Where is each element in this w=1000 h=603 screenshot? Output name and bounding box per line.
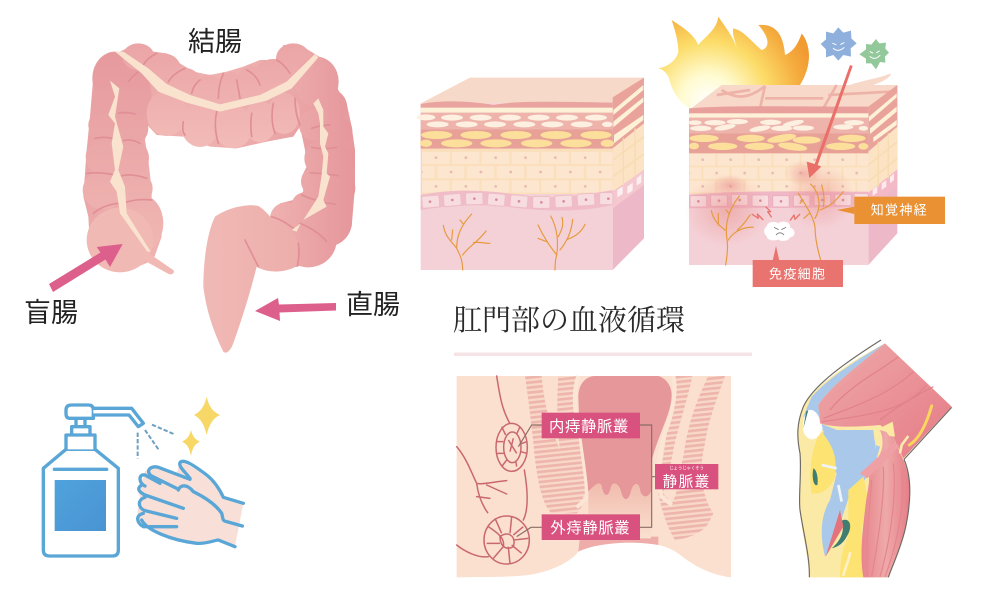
label: venous plexus: 静脈叢 xyxy=(663,473,711,490)
leader lines xyxy=(517,425,656,537)
colon: ascending segment xyxy=(83,52,163,252)
label: colon: 結腸 xyxy=(188,27,242,57)
label: external plexus xyxy=(542,514,640,540)
illustration: hand sanitizer xyxy=(43,397,243,556)
arrow: pathogen into skin xyxy=(807,65,853,178)
yellow flat cells xyxy=(420,131,614,147)
hands xyxy=(137,461,243,547)
sensory nerve label xyxy=(837,197,945,224)
label: venous plexus xyxy=(655,464,718,490)
dark accents xyxy=(803,410,850,548)
basal cells xyxy=(422,192,613,208)
skin top face xyxy=(421,78,644,103)
internal hemorrhoidal plexus xyxy=(496,423,527,471)
label: rectum: 直腸 xyxy=(346,290,400,320)
spray xyxy=(138,425,175,458)
label: internal plexus: 内痔静脈叢 xyxy=(549,418,629,435)
illustration: healthy skin block xyxy=(417,78,644,270)
sparkle large xyxy=(194,397,220,435)
skin side face xyxy=(613,78,644,270)
blue connective tissue xyxy=(803,343,885,557)
immune cell label: 免疫細胞 xyxy=(769,266,826,281)
flame xyxy=(658,17,809,108)
illustration: knee anatomy xyxy=(798,340,952,577)
label: cecum: 盲腸 xyxy=(24,298,78,328)
blood vessels xyxy=(457,376,527,557)
colon: silhouette xyxy=(83,43,355,272)
hatched muscle bands xyxy=(525,376,725,540)
colon: cecum xyxy=(87,208,174,274)
skin layers xyxy=(421,101,613,270)
immune cell label xyxy=(753,260,843,287)
colon: creases xyxy=(87,53,338,267)
label: internal plexus xyxy=(542,413,640,438)
skin side face xyxy=(868,85,897,265)
virus blue xyxy=(821,27,857,61)
rectum xyxy=(203,205,299,353)
keratinocyte cells xyxy=(417,114,613,127)
sensory nerve label: 知覚神経 xyxy=(871,203,928,218)
skin outline xyxy=(798,340,952,577)
calf muscle xyxy=(860,430,910,577)
inflammation glows xyxy=(685,160,855,247)
heading: anal circulation: 肛門部の血液循環 xyxy=(453,304,685,337)
virus green xyxy=(859,39,889,69)
basal cells xyxy=(690,193,868,207)
anal canal xyxy=(578,376,672,499)
leg silhouette xyxy=(798,343,952,577)
tissue background xyxy=(457,376,731,577)
pale strip outlines xyxy=(575,376,675,507)
bottle label xyxy=(55,480,106,531)
patella highlight xyxy=(803,410,823,439)
spark marks xyxy=(752,207,800,221)
thigh muscle xyxy=(818,343,952,458)
arrow: to cecum xyxy=(49,244,123,292)
lower mucosa xyxy=(578,537,658,552)
disordered yellow cells xyxy=(689,132,868,152)
colon: descending segment xyxy=(292,57,355,247)
external hemorrhoidal plexus xyxy=(484,516,529,564)
sensory nerve left xyxy=(443,214,490,270)
arrow: to rectum xyxy=(255,298,336,321)
yellow tendons xyxy=(822,406,932,575)
sparkle small xyxy=(182,430,200,456)
colon: sigmoid segment xyxy=(270,202,337,267)
illustration: inflamed skin block xyxy=(658,17,945,287)
sensory nerve right xyxy=(798,184,843,260)
divider xyxy=(454,352,752,356)
yellow fat pad xyxy=(810,432,836,494)
bottle xyxy=(43,405,143,556)
disordered pale cells xyxy=(688,119,868,133)
colon: mesentery band xyxy=(108,52,330,252)
skin layers xyxy=(689,106,868,265)
illustration: colon xyxy=(83,43,355,353)
label: external plexus: 外痔静脈叢 xyxy=(550,520,630,537)
colon: transverse segment xyxy=(122,43,311,148)
immune label pointer xyxy=(773,246,779,261)
skin top face with cracks xyxy=(689,73,897,110)
tibial muscle strip xyxy=(826,510,843,557)
sensory nerve right xyxy=(538,216,585,270)
illustration: anal venous plexus xyxy=(457,376,731,577)
immune cell xyxy=(764,222,794,241)
anal verge xyxy=(588,484,651,538)
label: venous plexus: じょうじゃくそう xyxy=(669,464,704,471)
sensory nerve left xyxy=(711,196,753,265)
